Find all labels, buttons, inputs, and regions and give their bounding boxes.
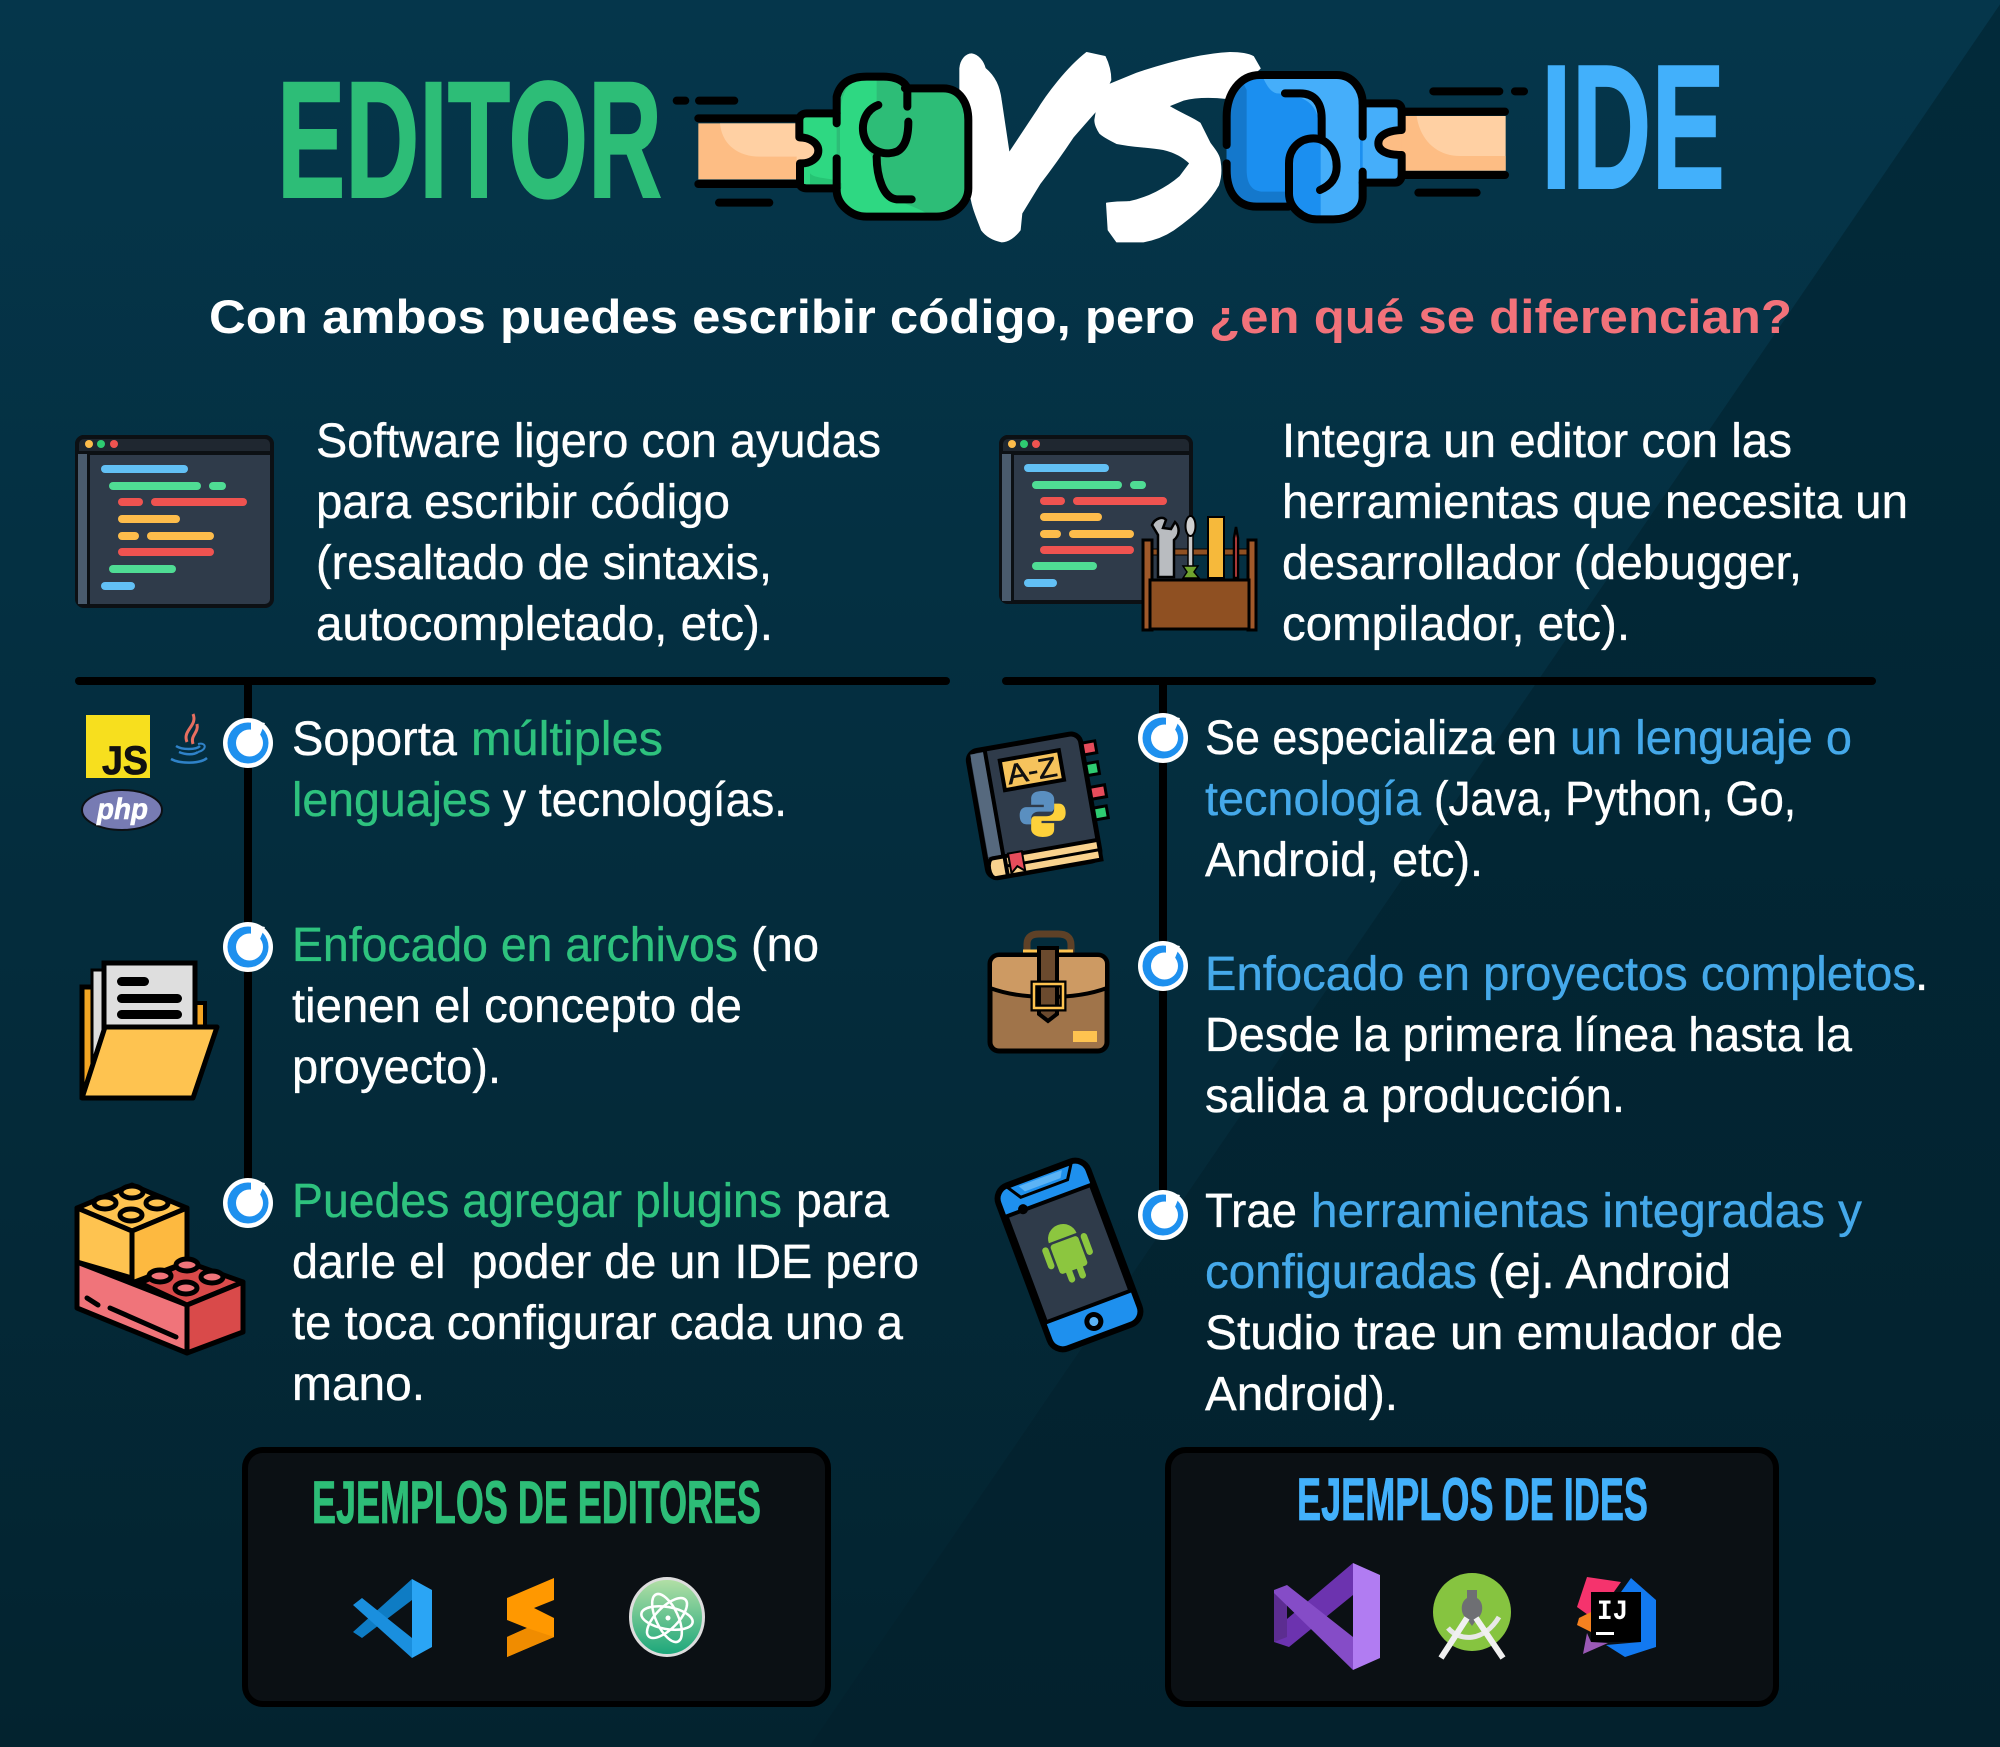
text: IDE description: Integra un editor con las [1282, 415, 1792, 468]
divider: right header rule and timeline [1002, 677, 1876, 1211]
text: IDE description: herramientas que necesita un [1282, 476, 1908, 529]
VS brush lettering [960, 53, 1260, 242]
text: editor point 3: Puedes agregar plugins [292, 1175, 782, 1228]
title: IDE: IDE [1541, 28, 1725, 226]
text: editor point 3 [292, 1175, 919, 1411]
bullet: left 2 [223, 922, 273, 972]
panel: editor examples [245, 1450, 828, 1704]
subtitle: Con ambos puedes escribir código, pero [209, 290, 1195, 343]
bullet: left 3 [223, 1178, 273, 1228]
text: IDE point 1: Android, etc). [1205, 834, 1483, 887]
bullet: right 1 [1138, 713, 1188, 763]
text: IDE point 3: Trae [1205, 1185, 1297, 1238]
text: IDE description [1282, 415, 1908, 651]
icon: JavaScript logo: JS [102, 739, 148, 783]
icon: A-Z Python book: A-Z [1005, 751, 1059, 790]
icon: blue boxing glove [1227, 75, 1524, 219]
icon: IntelliJ IDEA: IJ [1597, 1597, 1628, 1628]
icon: code window with toolbox [1001, 437, 1256, 630]
text: editor point 3: darle el poder de un IDE pero [292, 1236, 919, 1289]
title: EDITOR: EDITOR [277, 48, 662, 233]
heading: IDE examples: EJEMPLOS DE IDES [1297, 1466, 1648, 1533]
text: IDE point 3: Studio trae un emulador de [1205, 1307, 1783, 1360]
text: editor point 2 [292, 919, 819, 1094]
text: IDE point 2: Desde la primera línea hasta la [1205, 1009, 1852, 1062]
text: IDE point 3: (ej. Android [1488, 1246, 1731, 1299]
text: IDE point 3 [1205, 1185, 1862, 1421]
text: IDE point 1: tecnología [1205, 773, 1421, 826]
bullet: left 1 [223, 718, 273, 768]
icon: JavaScript logo [86, 715, 150, 783]
icon: IntelliJ IDEA [1577, 1577, 1656, 1657]
text: editor point 3: para [796, 1175, 889, 1228]
icon: Android phone [994, 1157, 1144, 1353]
text: editor description: Software ligero con ayudas [316, 415, 881, 468]
text: IDE description: desarrollador (debugger, [1282, 537, 1802, 590]
divider: left header rule and timeline [75, 677, 950, 1181]
text: editor point 1: y tecnologías. [503, 774, 787, 827]
text: editor point 2: proyecto). [292, 1041, 501, 1094]
icon: code editor window [77, 437, 272, 606]
text: editor point 2: tienen el concepto de [292, 980, 742, 1033]
icon: briefcase [990, 934, 1107, 1051]
text: editor description: autocompletado, etc). [316, 598, 773, 651]
text: IDE point 3: herramientas integradas y [1311, 1185, 1862, 1238]
icon: PHP logo [82, 790, 162, 830]
subtitle: ¿en qué se diferencian? [1209, 290, 1792, 343]
text: IDE point 3: Android). [1205, 1368, 1398, 1421]
text: editor point 1: lenguajes [292, 774, 491, 827]
text: IDE description: compilador, etc). [1282, 598, 1630, 651]
icon: Android Studio [1433, 1573, 1511, 1658]
text: IDE point 1 [1205, 712, 1852, 887]
text: IDE point 2: Enfocado en proyectos completos [1205, 948, 1916, 1001]
icon: Sublime Text [507, 1578, 554, 1657]
text: IDE point 2: salida a producción. [1205, 1070, 1625, 1123]
text: IDE point 1: Se especializa en [1205, 712, 1557, 765]
icon: PHP logo: php [96, 793, 148, 826]
text: editor point 2: (no [751, 919, 819, 972]
icon: Visual Studio [1274, 1563, 1380, 1670]
text: IDE point 1: un lenguaje o [1570, 712, 1852, 765]
bullet: right 3 [1138, 1190, 1188, 1240]
icon: VS Code [353, 1579, 432, 1658]
text: editor description: para escribir código [316, 476, 730, 529]
icon: Java logo [171, 714, 207, 763]
subtitle [209, 290, 1792, 343]
text: IDE point 3: configuradas [1205, 1246, 1477, 1299]
text: editor description [316, 415, 881, 651]
text: editor point 1: múltiples [471, 713, 663, 766]
heading: editor examples: EJEMPLOS DE EDITORES [312, 1469, 761, 1536]
icon: green boxing glove [677, 77, 968, 217]
icon: building bricks [77, 1185, 243, 1353]
icon: Atom [630, 1578, 704, 1656]
icon: A-Z Python book [967, 730, 1117, 879]
text: editor point 1 [292, 713, 787, 827]
text: editor point 3: te toca configurar cada uno a [292, 1297, 903, 1350]
text: IDE point 2 [1205, 948, 1928, 1123]
text: editor point 1: Soporta [292, 713, 457, 766]
panel: IDE examples [1168, 1450, 1776, 1704]
text: editor description: (resaltado de sintaxis, [316, 537, 772, 590]
bullet: right 2 [1138, 941, 1188, 991]
text: editor point 2: Enfocado en archivos [292, 919, 738, 972]
text: IDE point 1: (Java, Python, Go, [1434, 773, 1796, 826]
text: editor point 3: mano. [292, 1358, 425, 1411]
text: IDE point 2: . [1915, 948, 1928, 1001]
icon: folder with documents [82, 963, 217, 1098]
